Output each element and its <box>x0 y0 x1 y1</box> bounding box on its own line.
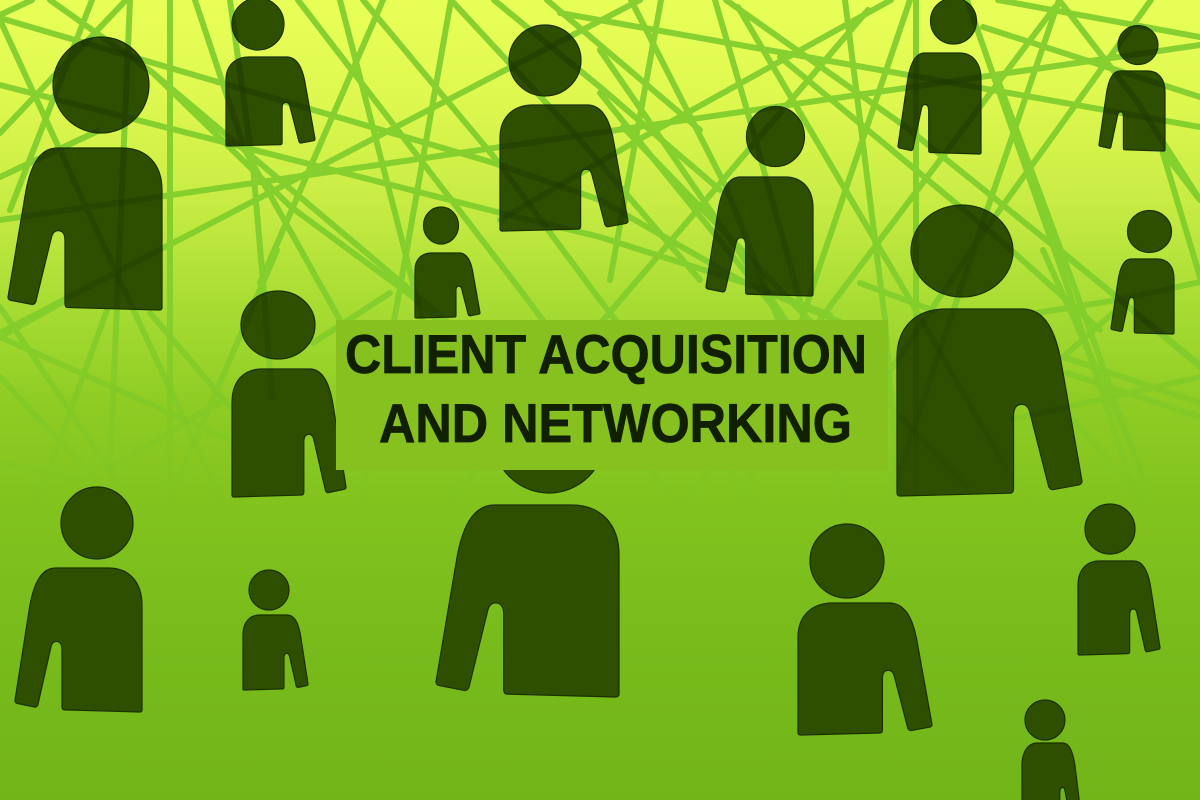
network of connecting lines <box>0 0 1200 520</box>
person figure 1 <box>8 37 162 310</box>
person figure 5 <box>898 0 981 154</box>
person figure 9 <box>232 291 346 497</box>
person figure 6 <box>1099 26 1165 151</box>
title panel <box>336 320 888 470</box>
person figure 2 <box>226 0 315 146</box>
person figure 13 <box>436 381 619 697</box>
person figure 3 <box>500 25 628 231</box>
person figure 10 <box>897 205 1082 496</box>
person figure 15 <box>1078 504 1160 655</box>
person figure 11 <box>15 487 142 712</box>
network lines showing through the figures <box>22 2 1164 484</box>
person figure 16 <box>1022 700 1082 800</box>
title text: AND NETWORKING <box>379 392 852 454</box>
person figure 14 <box>798 524 932 735</box>
person figure 7 <box>1111 210 1174 334</box>
person figure 8 <box>415 207 480 318</box>
person figure 12 <box>243 570 308 690</box>
person figure 4 <box>706 106 813 296</box>
title text: CLIENT ACQUISITION <box>345 323 867 385</box>
